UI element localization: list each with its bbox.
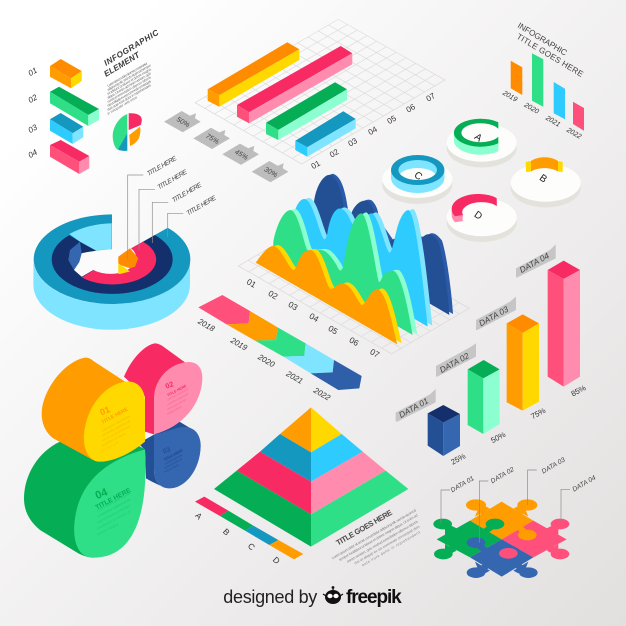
disc A: A [472,132,484,145]
legend letters: D [271,555,282,566]
icon: freepik logo [323,586,343,604]
petal 03: blue: incididunt ut labore [163,462,180,474]
data tag labels: DATA 03 [477,304,510,328]
title: TITLE GOES HERE [515,32,585,79]
petal 03: blue: consectetur adipiscing elit [163,453,183,466]
piece: blue [467,537,538,578]
petal 02: pink: consectetur adipiscing elit [166,392,189,407]
petal 03: blue: TITLE HERE [163,448,184,462]
axis labels [310,91,437,171]
petal 01: orange: sed do eiusmod tempor [101,424,131,443]
bar: orange [208,42,299,107]
callout titles: TITLE HERE [146,155,179,178]
block 03 [27,113,83,144]
panel: donut chart [33,155,218,330]
petal 01: orange [42,358,145,462]
callout labels: DATA 04 [571,474,597,494]
year labels: 2019 [500,89,518,104]
percentage tags: 45% [233,149,249,162]
column: data 03 [507,314,539,411]
petal 04: green: incididunt ut labore et [96,509,131,531]
legend letters [193,510,282,566]
tier: pink [237,452,386,514]
body text: Lorem ipsum dolor sit amet, consectetur [106,61,149,88]
timeline years [195,316,332,403]
year labels: 2021 [543,114,561,129]
petal 01: orange: TITLE HERE [101,406,130,426]
panel: pyramid [193,407,421,567]
heading: infographic element: INFOGRAPHIC [102,28,161,68]
axis labels: 05 [386,113,398,126]
petal 01: orange: 01 [98,404,111,417]
pyramid text: Lorem ipsum dolor sit amet, consectetur adipiscing elit, sed do eiusmod [331,508,417,560]
timeline years: 2022 [311,385,332,403]
timeline years: 2020 [255,352,277,369]
body text: adipiscing elit, sed do eiusmod tempor [106,63,152,92]
ring: navy [52,235,173,294]
petal 04: green: TITLE HERE [95,487,133,512]
axis labels: 03 [347,136,359,148]
legend letters: C [246,541,257,552]
petal 02: pink: sed do eiusmod tempor [166,397,187,411]
callout lines [441,470,570,543]
axis labels: 07 [368,346,382,360]
grid [238,220,469,354]
data tag labels: DATA 01 [397,396,430,420]
column: data 04 [548,261,580,387]
axis labels: 04 [367,124,379,137]
percentage tags: 50% [175,116,191,129]
footer credit [223,586,402,608]
panel: area mountain chart [195,174,469,403]
timeline years: 2021 [284,369,305,386]
panel: stacked blocks with heading and pie [27,28,161,174]
petal 04: green: dolore magna [96,522,119,537]
year labels: 2020 [522,101,540,116]
body text: in voluptate velit esse [106,95,138,116]
bar: green [266,82,347,140]
grid [195,19,445,164]
axis labels: 02 [328,147,341,159]
ring: orange [118,248,138,268]
disc A [447,119,517,168]
block 01 [27,59,82,88]
piece: pink [499,519,569,559]
axis labels: 03 [287,299,300,313]
timeline years: 2018 [195,316,217,334]
petal 04: green [24,442,146,558]
inner wall [69,223,112,253]
tier: green [214,471,408,547]
data tag labels: DATA 02 [438,350,471,375]
axis labels: 06 [348,335,361,348]
disc B [511,157,581,208]
pie chart [113,113,142,151]
petal 03: blue: Lorem ipsum dolor sit amet [163,449,183,462]
axis labels: 01 [245,276,258,290]
block 02: 02 [27,92,39,105]
panel: isometric horizontal bar chart [164,19,445,182]
body text: duis aute irure dolor in reprehenderit [106,83,152,112]
callout labels [450,456,597,494]
petal 04: green: Lorem ipsum dolor sit amet [96,491,131,513]
petal 01: orange: consectetur adipiscing elit [101,419,131,438]
panel: small column chart [500,21,585,141]
panel: 3D column chart [396,244,588,467]
ring: teal [34,214,190,304]
piece: orange [466,499,537,539]
ring: pink [82,242,156,284]
columns [511,53,584,131]
petal 04: green: 04 [94,486,110,502]
percentage tags: 75% [204,133,220,146]
series: green [273,209,417,335]
legend strip [195,497,303,559]
outer wall [33,259,190,330]
timeline years: 2019 [228,335,249,353]
block 04 [27,140,89,174]
petal 01: orange: et dolore [101,440,119,453]
column: data 02 [468,360,500,434]
body text: incididunt ut labore et dolore magna [106,67,152,96]
petal 04: green: consectetur adipiscing elit [96,497,131,519]
disc C: C [412,170,424,183]
petal 02: pink: 02 [164,379,175,391]
panel: ring discs [382,119,581,242]
piece: green [433,519,504,559]
pyramid text: aute irure dolor in reprehenderit [361,530,421,567]
bar: blue [295,111,356,157]
data tags [396,244,556,422]
axis labels [245,276,382,360]
callout labels: DATA 03 [541,456,567,476]
timeline arrow [198,295,362,390]
percent labels [449,383,588,467]
centre hole [74,248,136,277]
pyramid title: TITLE GOES HERE [334,508,394,547]
data tag labels [397,250,551,420]
axis labels: 06 [405,102,417,114]
petal 02: pink [124,343,202,434]
percent labels: 25% [449,451,467,467]
column: data 01 [428,405,460,456]
callout titles: TITLE HERE [186,194,218,217]
petal 03: blue [138,421,201,488]
percentage tags: 30% [263,166,278,179]
percentage tags [164,111,288,182]
axis labels: 05 [327,323,340,337]
block 02 [27,87,99,126]
pyramid text: tempor incididunt ut labore et dolore magna aliqua. Ut enim ad [338,513,418,562]
petal 01: orange: incididunt ut labore [101,431,127,448]
pink knob [499,548,518,559]
heading: infographic element: ELEMENT [102,50,142,79]
body text: nostrud exercitation ullamco laboris [106,75,152,104]
series: dark blue [314,174,453,315]
callout titles: TITLE HERE [156,168,189,191]
disc D [447,194,517,242]
tier: blue [260,434,363,482]
block 01: 01 [27,66,39,78]
percent labels: 85% [570,383,588,398]
disc D: D [472,209,484,223]
petal 03: blue: 03 [162,446,172,456]
petal 02: pink: Lorem ipsum dolor sit amet [166,387,189,402]
pyramid text: nisi ut aliquip ex ea commodo consequat duis [353,524,421,566]
legend letters: A [193,510,205,522]
title: INFOGRAPHIC [516,21,569,58]
petal 02: pink: TITLE HERE [167,384,188,398]
block 04: 04 [27,147,39,160]
petal 02: pink: incididunt ut labore [166,404,183,416]
year labels [500,89,582,141]
bar: pink [237,46,352,123]
orange knob [517,525,537,540]
axis labels: 07 [425,91,437,103]
tier: top [280,407,342,452]
body text: nisi ut aliquip ex ea commodo consequat [106,79,152,108]
callout titles: TITLE HERE [171,181,204,204]
panel: teardrop petals [24,343,202,558]
callout titles [146,155,218,217]
designed by: designed by [223,587,317,607]
series: cyan [287,198,432,327]
block 03: 03 [27,122,39,135]
panel: puzzle [433,456,597,578]
year labels: 2022 [564,126,582,141]
callout lines [128,175,183,260]
ring: yellow [118,263,130,274]
axis labels: 01 [310,158,322,171]
percent labels: 50% [489,430,507,445]
disc C [382,155,452,204]
axis labels: 04 [308,311,321,324]
inner wall: blue [68,242,82,270]
freepik: freepik [346,587,402,608]
body text: aliqua. Ut enim ad minim veniam, quis [106,71,152,100]
petal 01: orange: Lorem ipsum dolor sit amet [101,414,131,433]
pyramid text: minim veniam, quis nostrud exercitation ullamco laboris [346,519,419,564]
percent labels: 75% [529,406,547,421]
petal 03: blue: sed do eiusmod tempor [163,457,183,470]
disc B: B [537,173,549,186]
axis labels: 02 [267,288,280,302]
series: orange [256,245,402,344]
data tag labels: DATA 04 [518,250,551,275]
callout labels: DATA 02 [490,466,516,485]
body text [106,61,152,116]
callout labels: DATA 01 [450,475,476,494]
legend letters: B [221,526,232,538]
petal 04: green: sed do eiusmod tempor [96,503,132,525]
